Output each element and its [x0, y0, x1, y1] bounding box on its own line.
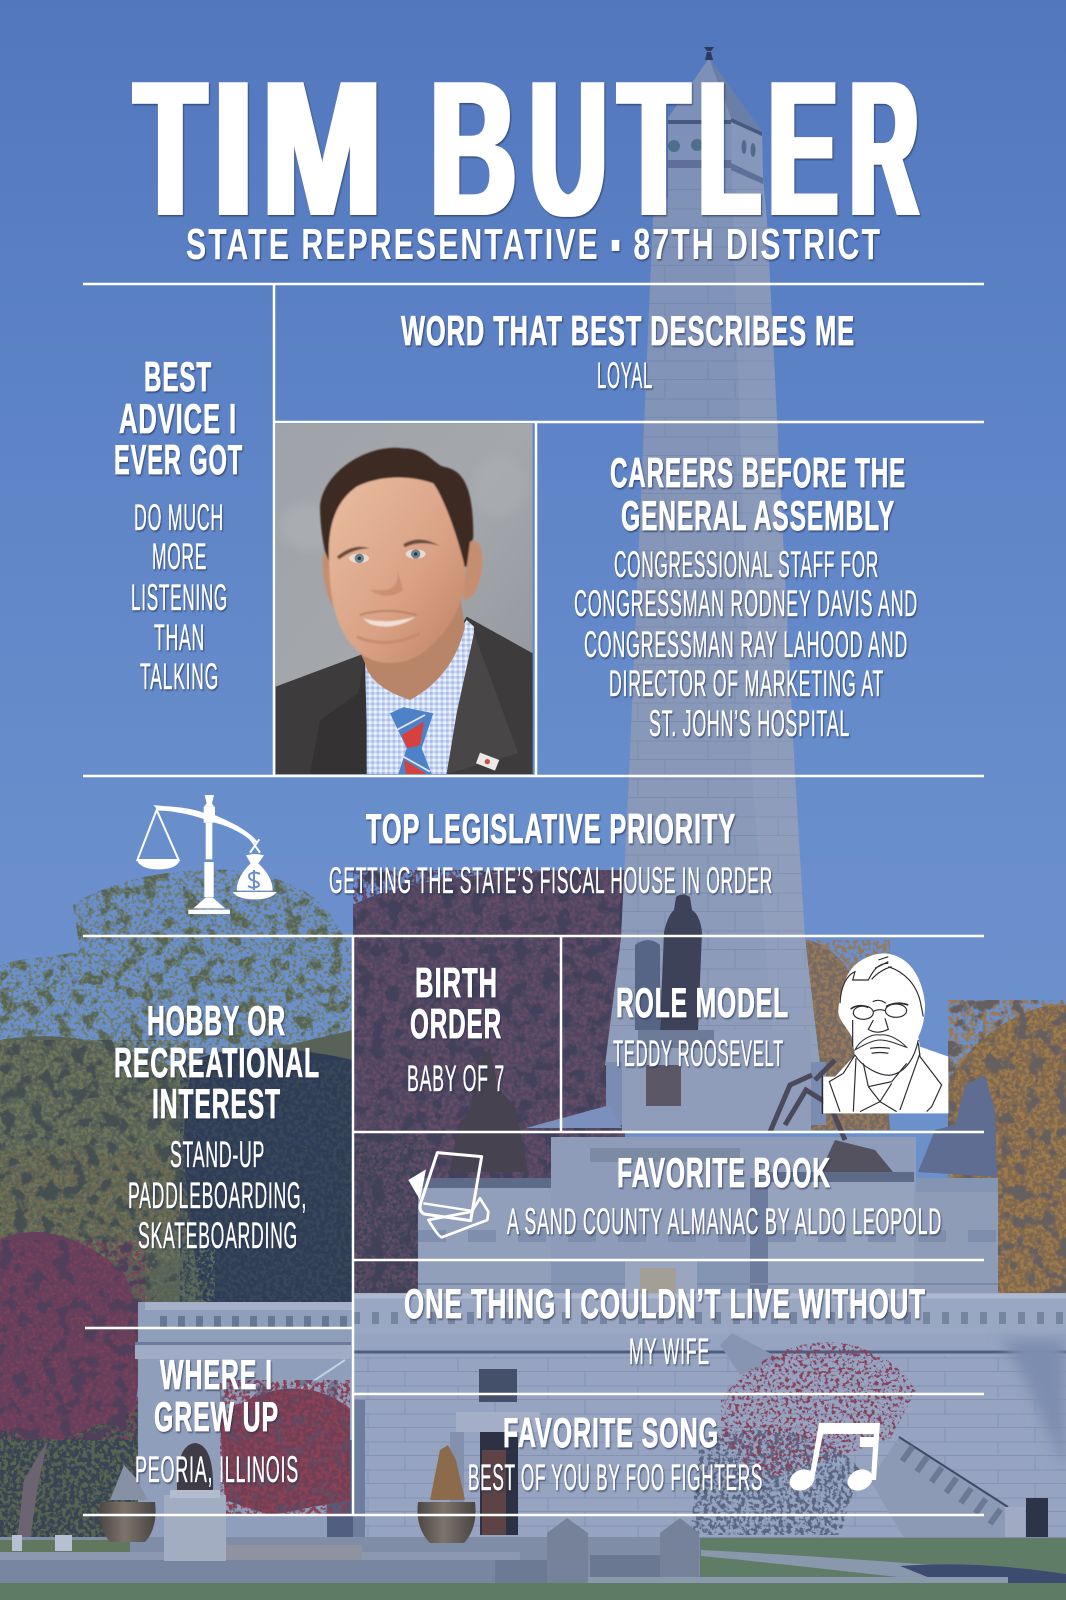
panel: word that best describes me: LOYAL [597, 355, 653, 396]
panel: best advice: MORE [152, 536, 207, 577]
panel: best advice: DO MUCH [134, 497, 224, 538]
pedestal and Lincoln statue [526, 894, 826, 1132]
text: PEORIA, ILLINOIS [135, 1449, 299, 1490]
title: L [699, 40, 760, 256]
panel: best advice: EVER GOT [114, 436, 243, 483]
panel: where I grew up: WHERE I [160, 1351, 273, 1398]
obelisk [605, 47, 820, 1065]
red shrubs [220, 1342, 916, 1535]
panel: one thing I couldn't live without: MY WIFE [629, 1331, 710, 1372]
panel: birth order: ORDER [410, 1000, 502, 1047]
title [135, 40, 918, 256]
portrait photo [276, 424, 533, 774]
panel: careers before the general assembly [574, 449, 918, 744]
tomb terrace and lower building [135, 1293, 1066, 1540]
panel: one thing I couldn't live without [404, 1280, 926, 1372]
panel: top legislative priority: TOP LEGISLATIVE PRIORITY [366, 805, 736, 852]
panel: hobby or recreational interest: SKATEBOARDING [138, 1215, 298, 1256]
panel: where I grew up [135, 1351, 299, 1490]
icon: balance scale with money bag [137, 795, 277, 914]
panel: hobby or recreational interest: INTEREST [152, 1080, 281, 1127]
panel: word that best describes me [401, 307, 855, 396]
panel: hobby or recreational interest: RECREATIONAL [114, 1039, 320, 1086]
panel: favorite book: FAVORITE BOOK [617, 1149, 831, 1196]
title: B [430, 40, 516, 256]
icon: Teddy Roosevelt portrait [822, 953, 948, 1114]
text: R [850, 40, 918, 256]
panel: best advice: LISTENING [131, 577, 228, 618]
panel: best advice: THAN [154, 617, 205, 658]
title: T [619, 40, 689, 256]
panel: hobby or recreational interest [114, 997, 320, 1256]
text: TEDDY ROOSEVELT [613, 1033, 784, 1074]
title: E [768, 40, 838, 256]
panel: top legislative priority [329, 805, 773, 901]
panel: best advice: ADVICE I [119, 395, 237, 442]
purple tree behind the tomb [353, 870, 625, 1310]
panel: role model: ROLE MODEL [616, 979, 789, 1026]
title: M [262, 40, 382, 256]
panel: best advice: BEST [144, 353, 212, 400]
orange trees on the right [806, 940, 1066, 1300]
grid rules [83, 284, 984, 1515]
panel: best advice: TALKING [140, 656, 219, 697]
panel: hobby or recreational interest: STAND-UP [170, 1134, 265, 1175]
icon: music notes [786, 1423, 880, 1495]
title: T [135, 40, 206, 256]
title: U [530, 40, 607, 256]
panel: favorite song [468, 1409, 763, 1498]
panel: hobby or recreational interest: HOBBY OR [147, 997, 286, 1044]
icon: stacked books [408, 1153, 488, 1237]
panel: best advice [114, 353, 243, 697]
panel: birth order [407, 959, 505, 1099]
tomb upper tier and bronze groups [418, 1048, 998, 1310]
panel: favorite song: FAVORITE SONG [503, 1409, 719, 1456]
left trees [0, 870, 353, 1540]
panel: role model [613, 979, 789, 1074]
panel: careers before the general assembly: ST. JOHN’S HOSPITAL [649, 703, 850, 744]
panel: birth order: BIRTH [415, 959, 498, 1006]
panel: favorite book [507, 1149, 942, 1242]
ground, urns and markers [0, 1443, 1066, 1600]
panel: hobby or recreational interest: PADDLEBOARDING, [128, 1175, 307, 1216]
title: I [213, 40, 253, 256]
text: BABY OF 7 [407, 1058, 505, 1099]
panel: where I grew up: GREW UP [154, 1393, 279, 1440]
